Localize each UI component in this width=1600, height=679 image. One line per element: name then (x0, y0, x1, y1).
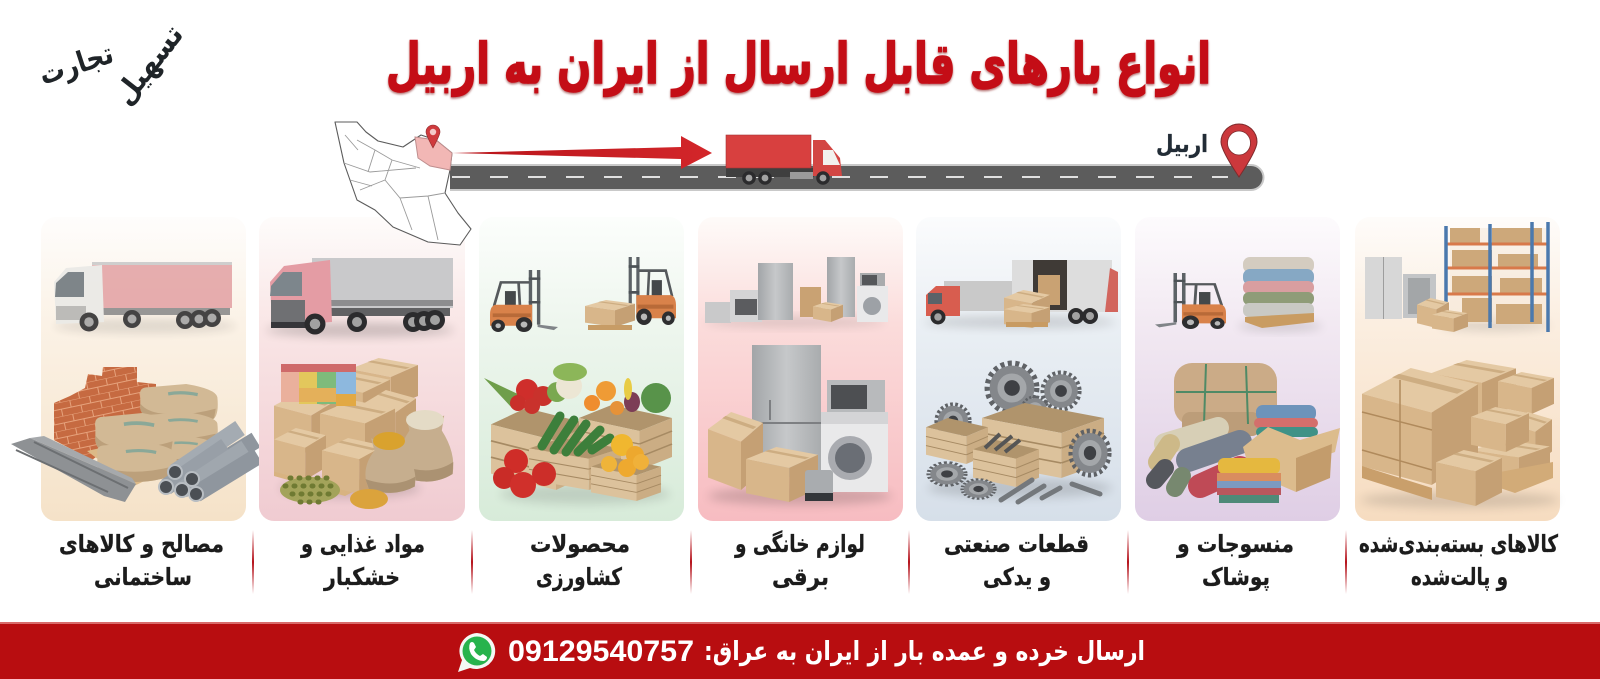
arrow (452, 136, 712, 169)
icon: origin pin (426, 125, 440, 148)
logo (35, 18, 190, 111)
icon: boxes on pallet (1004, 290, 1050, 328)
icon: gear right (1071, 432, 1109, 474)
icon: orange forklift (1155, 273, 1226, 329)
label: construction (59, 530, 224, 591)
title: انواع بارهای قابل ارسال از ایران به اربیل (386, 32, 1211, 97)
panel: packaged and palletised goods (1355, 217, 1560, 521)
label: packaged: و پالت‌شده (1411, 563, 1508, 591)
footer text: ارسال خرده و عمده بار از ایران به عراق: (704, 637, 1145, 667)
label: industrial: و یدکی (983, 563, 1051, 591)
label: appliances (734, 530, 865, 591)
icon: WhatsApp (458, 633, 495, 672)
label: industrial (944, 530, 1089, 591)
icon: forklift with pallet (585, 257, 676, 330)
icon: red delivery truck (726, 135, 842, 185)
label: appliances: لوازم خانگی و (734, 530, 865, 558)
panel: textiles and clothing (1135, 217, 1340, 521)
icon: palletised boxes (274, 358, 420, 498)
label: textiles (1176, 530, 1294, 591)
icon: tools (1001, 480, 1100, 502)
icon: warehouse rack (1440, 222, 1550, 332)
icon: vegetable crates (484, 363, 672, 504)
icon: front carton (1436, 450, 1502, 506)
icon: cucumbers (542, 416, 610, 452)
logo word: tashil: تسهیل (107, 18, 190, 111)
icon: steel pipes (159, 428, 258, 501)
icon: grey semi truck (266, 258, 454, 337)
icon: green beans pile (280, 477, 340, 503)
icon: small red truck (924, 281, 1116, 328)
icon: large steel refrigerator (708, 345, 892, 505)
label: food (300, 530, 425, 591)
label: agriculture (530, 530, 630, 591)
icon: wooden crates (926, 403, 1112, 498)
icon: toaster (805, 470, 833, 501)
label: appliances: برقی (772, 563, 829, 591)
icon: pallet (87, 437, 196, 486)
icon: tied burlap bale (1174, 363, 1277, 436)
panel: construction materials (11, 217, 258, 521)
icon: brick wall (54, 367, 156, 460)
label: textiles: پوشاک (1202, 563, 1270, 591)
footer bar (0, 622, 1600, 679)
icon: food packages (281, 364, 356, 406)
icon: boxes back stack (1360, 360, 1560, 508)
icon: steel I-beams (11, 436, 136, 502)
label: food: خشکبار (323, 563, 400, 591)
label: construction: ساختمانی (94, 563, 192, 591)
panel: foodstuffs (259, 217, 465, 521)
icon: row of small appliances (705, 257, 888, 327)
icon: cement sacks (95, 384, 218, 482)
category labels (59, 530, 1558, 591)
icon: tomatoes (493, 449, 556, 498)
icon: shrink-wrapped pallet (1362, 368, 1478, 500)
icon: mixed fruit (584, 378, 671, 415)
icon: small boxes on pallet (1417, 298, 1468, 332)
icon: fabric rolls (1155, 428, 1240, 488)
label: packaged (1359, 530, 1558, 591)
label: construction: مصالح و کالاهای (59, 530, 224, 558)
icon: tall carton (708, 412, 763, 490)
icon: labelled box (1471, 407, 1529, 452)
label: industrial: قطعات صنعتی (944, 530, 1089, 558)
icon: destination pin (1221, 124, 1257, 177)
label: textiles: منسوجات و (1176, 530, 1294, 558)
icon: pallet of textile bales (1238, 257, 1322, 331)
icon: washing machine (821, 412, 888, 492)
map: Iran (335, 122, 471, 245)
icon: microwave (827, 380, 885, 413)
icon: pink semi truck (53, 262, 237, 333)
panel: agricultural products (479, 217, 684, 521)
panel: home and electrical appliances (698, 217, 903, 521)
label: agriculture: محصولات (530, 530, 630, 558)
icon: folded clothes (1217, 458, 1281, 503)
label: food: مواد غذایی و (300, 530, 425, 558)
panel: industrial parts (916, 217, 1121, 521)
icon: forklift left (490, 270, 558, 332)
icon: white appliances (1365, 257, 1436, 319)
icon: yellow grain pile (350, 489, 388, 509)
icon: open carton (1243, 427, 1340, 492)
icon: bottom gears (929, 463, 994, 498)
icon: citrus (601, 434, 649, 477)
icon: open delivery truck (1012, 260, 1118, 324)
label: agriculture: کشاورزی (536, 563, 622, 591)
icon: rice sack (400, 410, 453, 482)
icon: peppers and greens (484, 363, 587, 414)
highlighted province (415, 137, 452, 170)
icon: large gears (988, 364, 1079, 423)
icon: carton front (746, 447, 818, 502)
label: Erbil: اربیل (1156, 130, 1208, 158)
icon: blue clothes stack (1254, 405, 1318, 437)
phone number: 09129540757 (508, 635, 694, 668)
logo word: tejarat: تجارت (35, 36, 117, 92)
icon: corn sack (365, 432, 415, 493)
road (450, 164, 1264, 191)
